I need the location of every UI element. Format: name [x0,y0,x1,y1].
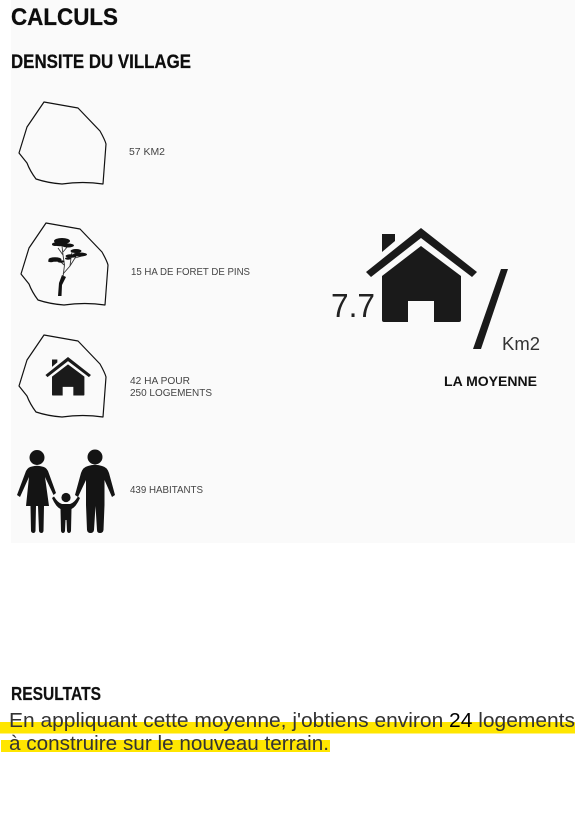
value: 7.7: 7.7 [331,287,375,324]
label: 42 ha for 250 dwellings [130,376,212,399]
heading: densite du village: DENSITE DU VILLAGE [11,52,191,73]
row: housing [19,335,212,417]
label: 57 km2: 57 KM2 [129,147,165,158]
label: 42 ha for 250 dwellings: 42 HA POUR [130,376,190,387]
slash [473,269,508,349]
heading: resultats: RESULTATS [11,684,101,704]
icon: family [17,450,115,533]
highlight: line 1 [0,722,575,734]
title: calculs: CALCULS [11,4,118,31]
text: line 1: En appliquant cette moyenne, j'obtiens environ 24 logements [9,710,575,732]
icon: outline with pine tree [21,223,108,305]
icon: village outline [19,102,106,184]
label: 439 inhabitants: 439 HABITANTS [130,485,203,496]
average density figure [331,228,540,389]
highlight: line 2 [1,740,330,752]
label: 42 ha for 250 dwellings: 250 LOGEMENTS [130,388,212,399]
unit: km2: Km2 [502,334,540,354]
row: pine forest [21,223,250,305]
icon: large house [366,228,477,322]
label: 15 ha forest: 15 HA DE FORET DE PINS [131,267,250,278]
results text block with highlight [0,710,575,755]
icon: outline with house [19,335,106,417]
text: line 2: à construire sur le nouveau terrain. [9,733,329,755]
panel: density background [11,0,575,543]
caption: la moyenne: LA MOYENNE [444,373,537,389]
row: inhabitants [17,450,203,533]
row: village area [19,102,165,184]
